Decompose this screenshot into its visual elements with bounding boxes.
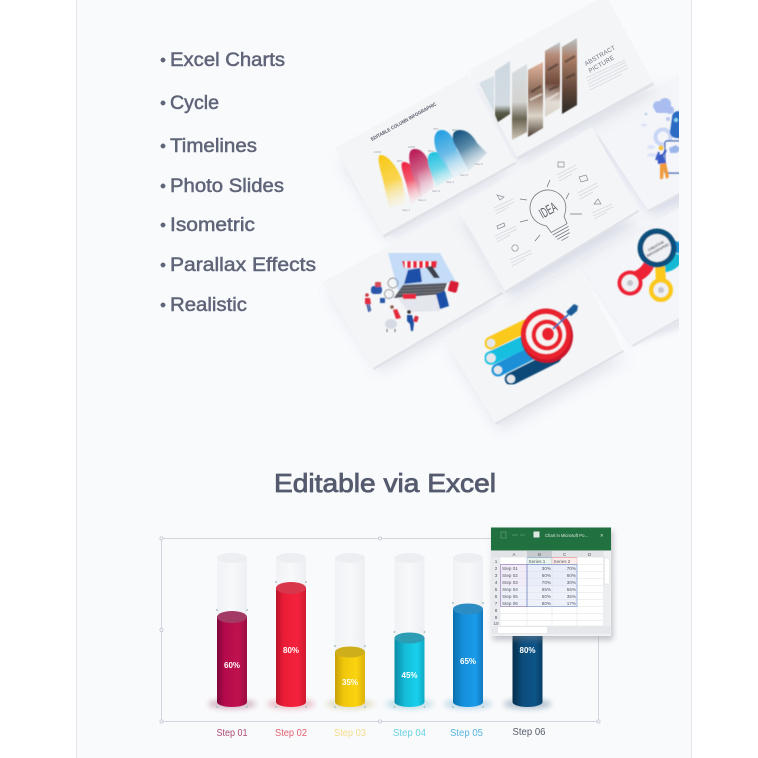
infographic bands [491,325,555,379]
slide: abstract picture [476,38,654,165]
bullet: Realistic: Realistic [170,294,247,316]
excel title bar: Chart in Microsoft Po... [545,533,588,538]
chart step labels: Step 03 [334,728,366,739]
excel worksheet: B [538,552,541,557]
chart value labels: Step 6 [475,162,484,166]
excel worksheet: 2 [495,566,498,571]
slide: cycle infographic [581,228,679,347]
icon: light bulb [530,190,570,241]
icon: rocket and phone [664,110,679,174]
bulb rays [520,180,582,241]
excel worksheet: Step 06 [502,601,518,606]
slide: upper right illustration [594,97,679,218]
chart step labels: Step 02 [275,728,307,739]
cylinder chart [208,553,552,709]
excel worksheet: Step 04 [502,587,518,592]
icon: coloured cycle nodes: INFOGRAPHIC [646,242,671,258]
excel worksheet: 70% [542,580,551,585]
excel worksheet: Step 01 [502,566,518,571]
excel worksheet: A [512,552,516,557]
excel worksheet: Step 03 [502,580,518,585]
chart value labels: Step 2 [418,198,427,202]
excel worksheet: 7 [495,601,498,606]
excel worksheet: Series 2 [554,559,571,564]
excel worksheet: 5 [495,587,498,592]
excel worksheet: 60% [567,573,576,578]
idea text blocks [494,165,613,266]
chart step labels [216,727,546,739]
cylinder: Step 03 35% [326,553,374,709]
bullet: Parallax Effects: Parallax Effects [170,254,316,276]
excel worksheet: 30% [542,566,551,571]
chart step labels: Step 06 [512,727,546,738]
bullet: Cycle: Cycle [170,92,219,114]
chart value labels: 90% [452,128,458,132]
excel worksheet: 80% [542,601,551,606]
chart value labels [374,127,484,212]
icon: target with dart [521,304,578,363]
heading: abstract picture: PICTURE [588,54,616,75]
excel worksheet: C [563,552,567,557]
icon: coloured cycle nodes: CREATIVE [647,240,665,252]
excel worksheet: 35% [567,594,576,599]
icon: person [656,146,669,179]
excel worksheet [491,551,610,634]
feature bullet list [161,49,316,316]
bullet: Photo Slides: Photo Slides [170,175,284,197]
heading: editable column infographic: EDITABLE COLUMN INFOGRAPHIC [370,101,438,143]
excel worksheet: Step 02 [502,573,518,578]
chart selection frame [160,537,600,723]
excel worksheet: 30% [567,580,576,585]
excel title bar: × [600,534,604,540]
excel worksheet: 8 [495,608,498,613]
chart step labels: Step 05 [450,728,483,739]
excel worksheet: 60% [542,573,551,578]
icon: shoppers [365,293,419,332]
excel worksheet: 3 [495,573,498,578]
cylinder: Step 01 60%: 60% [224,660,240,670]
collage artwork [332,38,679,428]
excel worksheet: Series 1 [528,559,546,564]
cylinder: Step 05 65% [444,553,492,709]
cylinder: Step 05 65%: 65% [460,656,476,666]
chart step labels: Step 01 [216,728,248,739]
chart value labels: Step 1 [402,208,411,212]
excel worksheet: 17% [567,601,576,606]
icon: laptop storefront [371,253,459,312]
chart value labels: 100% [374,150,382,154]
bullet: Timelines: Timelines [170,135,257,157]
bullet: Excel Charts: Excel Charts [170,49,285,71]
cylinder: Step 04 45% [386,553,434,709]
excel worksheet: Step 05 [502,594,518,599]
cylinder: Step 02 80%: 80% [283,645,299,655]
slide: idea light bulb [457,127,644,298]
excel worksheet: 60% [542,594,551,599]
excel data window [491,528,613,640]
cylinder: Step 04 45%: 45% [402,670,418,680]
excel worksheet: 10 [493,621,499,626]
photo strips [479,38,577,140]
cylinder: Step 06 80%: 80% [520,645,536,655]
bullet: Isometric: Isometric [170,214,255,236]
section heading: Editable via Excel: Editable via Excel [274,468,496,498]
excel worksheet: 6 [495,594,498,599]
cylinder: Step 01 60% [208,553,256,709]
cylinder: Step 06 80% [504,620,552,709]
band icons [486,338,516,384]
slide collage [332,38,679,428]
slide: target infographic [452,303,624,428]
chart value labels: 60% [428,149,434,153]
chart: overlapping column humps [379,130,487,208]
cylinder: Step 03 35%: 35% [342,677,358,687]
chart value labels: Step 5 [460,173,469,177]
excel worksheet: 55% [567,587,576,592]
chart value labels: 100% [408,145,416,149]
excel worksheet: 4 [495,580,498,585]
excel worksheet: 65% [542,587,551,592]
chart value labels: Step 4 [446,180,455,184]
excel worksheet: D [588,552,592,557]
icon: cloud and gear [641,98,674,157]
slide: editable column infographic [343,102,516,240]
chart value labels: 75% [433,127,439,131]
idea icons [497,162,601,251]
heading: abstract picture: ABSTRACT [584,44,617,68]
icon: coloured cycle nodes [618,228,682,302]
cylinder: Step 02 80% [267,553,315,709]
slide: online shopping illustration [332,252,503,370]
excel title bar [491,528,611,550]
body text lines [586,60,628,90]
excel worksheet: 1 [495,559,498,564]
chart value labels: Step 3 [432,189,441,193]
chart step labels: Step 04 [393,728,426,739]
chart value labels: 60% [397,159,403,163]
excel worksheet: 9 [495,615,498,620]
label: IDEA: IDEA [536,198,560,221]
excel worksheet: 70% [567,566,576,571]
